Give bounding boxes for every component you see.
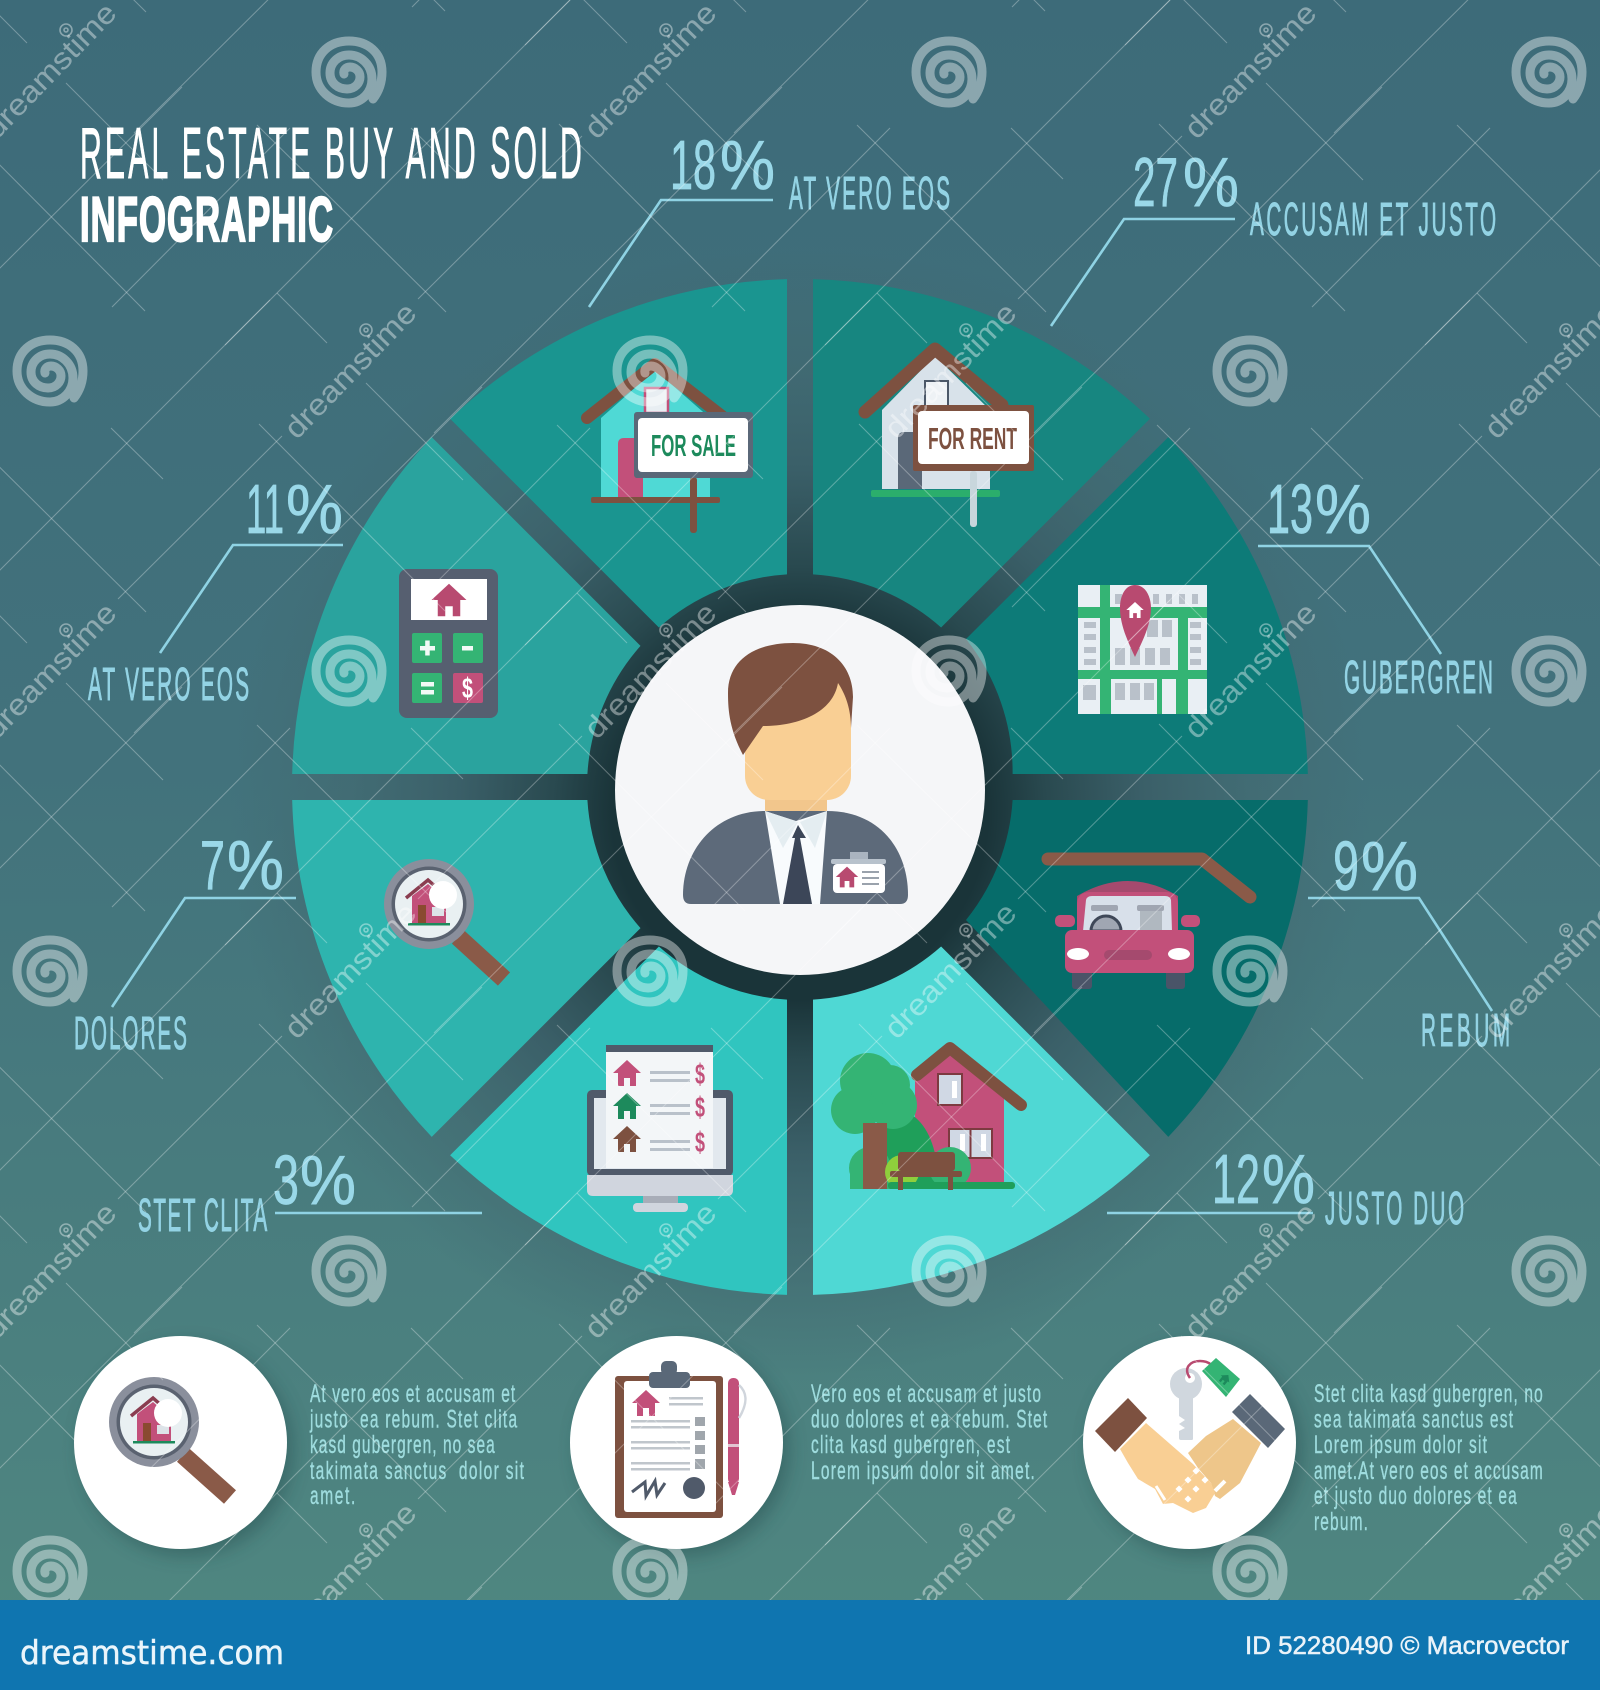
- icon: property listing on monitor: $: [695, 1059, 705, 1091]
- callout: 13% gubergren: [1258, 470, 1493, 703]
- callout: 9% rebum: [1308, 827, 1510, 1056]
- text block: contract: clita kasd gubergren, est: [811, 1431, 1010, 1459]
- callout: 11% at vero eos: 11: [246, 470, 284, 548]
- callout: 18% at vero eos: AT VERO EOS: [789, 168, 950, 219]
- callout: 3% stet clita: [138, 1141, 482, 1241]
- text block: search: takimata sanctus dolor sit: [310, 1457, 524, 1485]
- text block: handshake: sea takimata sanctus est: [1314, 1406, 1513, 1434]
- bottom circle shadows: [81, 1344, 1302, 1556]
- callout: 9% rebum: REBUM: [1421, 1005, 1510, 1056]
- text block: contract: Lorem ipsum dolor sit amet.: [811, 1457, 1035, 1485]
- text block: handshake: [1314, 1380, 1543, 1536]
- callout: 13% gubergren: 13: [1267, 470, 1313, 548]
- callout: 12% justo duo: 12: [1212, 1140, 1260, 1218]
- footer bar: [0, 1600, 1600, 1690]
- segment: 3%: [450, 946, 787, 1295]
- callout: 12% justo duo: JUSTO DUO: [1325, 1183, 1464, 1234]
- watermark overlay: dreamstime: [878, 897, 1023, 1045]
- icon: car in garage: [1048, 859, 1250, 989]
- agent suit: [683, 811, 908, 904]
- icon: house with tree and bench: [831, 1048, 1021, 1190]
- icon panel: search: [74, 1336, 287, 1549]
- portrait circle: [615, 605, 985, 975]
- callout: 12% justo duo: [1107, 1140, 1464, 1234]
- icon: property listing on monitor: $: [695, 1092, 705, 1124]
- segment: 9%: [966, 800, 1308, 1137]
- text block: search: amet.: [310, 1482, 355, 1510]
- title: [80, 113, 582, 255]
- segment: 11%: [292, 437, 640, 774]
- pie shadow and centre ring: [230, 242, 1370, 1382]
- callout: 27% accusam et justo: [1051, 143, 1496, 326]
- segment: 12%: [813, 946, 1150, 1295]
- callout: 12% justo duo: %: [1262, 1140, 1315, 1218]
- icon: magnifier: [109, 1377, 230, 1497]
- pie chart segments: [292, 279, 1308, 1295]
- callout: 9% rebum: %: [1361, 827, 1418, 905]
- callout: 7% dolores: 7: [200, 826, 225, 904]
- watermark overlay: dreamstime: [578, 0, 723, 145]
- agent shirt: [765, 811, 827, 904]
- text block: contract: duo dolores et ea rebum. Stet: [811, 1406, 1047, 1434]
- segment: 27%: [813, 279, 1150, 628]
- watermark overlay: dreamstime: [1178, 0, 1323, 145]
- watermark overlay: dreamstime: [1178, 1197, 1323, 1345]
- text block: contract: [811, 1380, 1047, 1485]
- icon: for sale house: FOR SALE: [651, 428, 736, 463]
- callout: 3% stet clita: %: [300, 1141, 356, 1219]
- icon: calculator: [399, 569, 498, 718]
- text block: handshake: Stet clita kasd gubergren, no: [1314, 1380, 1543, 1408]
- footer image id: ID 52280490 © Macrovector: [1245, 1632, 1569, 1660]
- central agent portrait: [615, 605, 985, 975]
- callout: 9% rebum: 9: [1333, 827, 1359, 905]
- callout: 18% at vero eos: [589, 126, 950, 307]
- watermark overlay: dreamstime: [578, 597, 723, 745]
- callout: 7% dolores: DOLORES: [74, 1008, 187, 1059]
- agent face: [745, 670, 851, 800]
- text block: handshake: rebum.: [1314, 1508, 1368, 1536]
- callout: 18% at vero eos: %: [720, 126, 775, 204]
- text block: search: [309, 1380, 524, 1510]
- icon: property listing on monitor: [587, 1045, 733, 1212]
- watermark overlay: dreamstime: [878, 1497, 1023, 1645]
- icon: clipboard and pen: [615, 1361, 746, 1518]
- icon: handshake: [1095, 1394, 1285, 1513]
- callout: 7% dolores: %: [227, 826, 284, 904]
- text block: handshake: Lorem ipsum dolor sit: [1314, 1431, 1487, 1459]
- watermark overlay: dreamstime: [278, 297, 423, 445]
- agent neck: [765, 790, 827, 820]
- text block: contract: Vero eos et accusam et justo: [811, 1380, 1041, 1408]
- watermark overlay: dreamstime: [878, 297, 1023, 445]
- watermark overlay: dreamstime: [278, 1497, 423, 1645]
- callout: 27% accusam et justo: 27: [1133, 143, 1178, 221]
- icon panel: handshake: [1083, 1336, 1296, 1549]
- callout: 7% dolores: [74, 826, 296, 1059]
- callout: 11% at vero eos: AT VERO EOS: [88, 659, 249, 710]
- icon panel: contract: [570, 1336, 783, 1549]
- callout: 3% stet clita: STET CLITA: [138, 1190, 267, 1241]
- callout: 13% gubergren: GUBERGREN: [1344, 652, 1493, 703]
- text block: handshake: amet.At vero eos et accusam: [1314, 1457, 1543, 1485]
- icon: city map with pin: [1078, 585, 1207, 714]
- callout: 3% stet clita: 3: [273, 1141, 299, 1219]
- title: REAL ESTATE BUY AND SOLD: [80, 113, 582, 194]
- callout: 13% gubergren: %: [1315, 470, 1371, 548]
- watermark overlay: dreamstime: [278, 897, 423, 1045]
- callout: 18% at vero eos: 18: [670, 126, 716, 204]
- icon: for sale house: [587, 364, 753, 533]
- watermark overlay: dreamstime: [578, 1197, 723, 1345]
- callout: 27% accusam et justo: ACCUSAM ET JUSTO: [1250, 194, 1496, 245]
- text block: handshake: et justo duo dolores et ea: [1314, 1482, 1517, 1510]
- segment: 13%: [966, 437, 1308, 774]
- segment: 7%: [292, 800, 640, 1137]
- callout: 11% at vero eos: [88, 470, 343, 710]
- icon: for rent house: FOR RENT: [928, 421, 1017, 456]
- callout: 27% accusam et justo: %: [1183, 143, 1239, 221]
- icon: key with tag: [1170, 1358, 1240, 1440]
- callout: 11% at vero eos: %: [286, 470, 343, 548]
- icon: for rent house: [865, 349, 1034, 527]
- text block: search: At vero eos et accusam et: [310, 1380, 515, 1408]
- agent tie: [783, 825, 812, 904]
- name badge: [831, 852, 886, 893]
- segment: 18%: [450, 279, 787, 628]
- title: INFOGRAPHIC: [80, 184, 333, 255]
- icon: calculator: $: [462, 673, 473, 705]
- icon: magnifier over house: [384, 859, 504, 979]
- text block: search: kasd gubergren, no sea: [310, 1431, 495, 1459]
- footer brand: dreamstime.com: [20, 1633, 284, 1672]
- agent hair: [728, 643, 853, 755]
- icon: property listing on monitor: $: [695, 1127, 705, 1159]
- watermark overlay: dreamstime: [1178, 597, 1323, 745]
- text block: search: justo ea rebum. Stet clita: [309, 1406, 517, 1434]
